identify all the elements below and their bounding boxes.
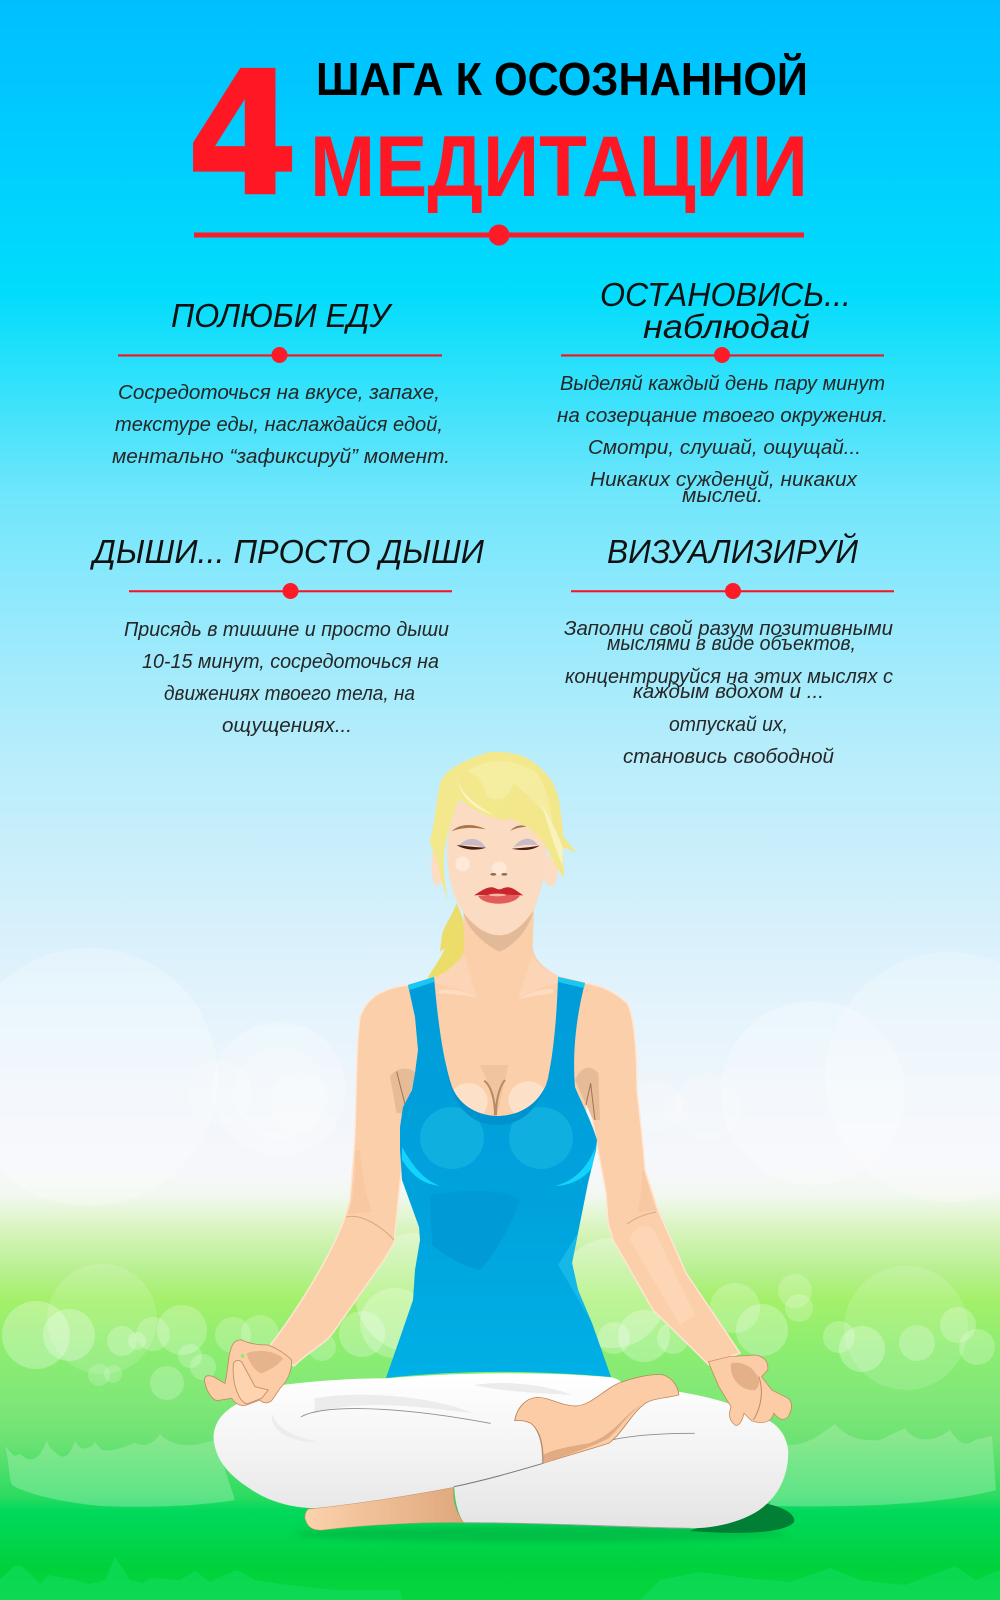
text block: Никаких суждений, никаких [590, 469, 858, 491]
text block: концентрируйся на этих мыслях с [565, 666, 893, 688]
text block: Выделяй каждый день пару минут [560, 373, 885, 395]
text block [557, 373, 888, 507]
text block: движениях твоего тела, на [164, 683, 415, 705]
text block: на созерцание твоего окружения. [557, 405, 888, 427]
heading: наблюдай [643, 308, 810, 345]
panel: visualize [564, 532, 894, 768]
text block: отпускай их, [669, 714, 788, 736]
arm creases and shading [346, 1150, 695, 1325]
ponytail [427, 903, 466, 979]
strap highlights [408, 977, 585, 990]
head, neck and chest [390, 752, 600, 1153]
brows [452, 825, 527, 831]
neckline shading [445, 1060, 552, 1125]
divider [571, 583, 894, 599]
waist fabric folds [430, 1191, 590, 1320]
index finger [233, 1360, 268, 1404]
face [447, 800, 547, 935]
text block: Присядь в тишине и просто дыши [124, 619, 449, 641]
foreground grass blades [0, 1557, 1000, 1600]
text block: Заполни свой разум позитивными [564, 618, 893, 640]
text block: каждым вдохом и ... [633, 681, 824, 703]
armpit shadows [390, 1068, 600, 1120]
translucent grass band [5, 1424, 996, 1507]
text block [112, 382, 450, 468]
eyeshadow [459, 839, 538, 848]
lower foot [305, 1487, 464, 1530]
heading: ДЫШИ... ПРОСТО ДЫШИ [89, 533, 484, 570]
divider [561, 347, 884, 363]
nose [490, 862, 507, 876]
blue tank top [386, 977, 611, 1378]
bokeh circles in the sky [0, 948, 1000, 1206]
panel: stop and observe [557, 276, 888, 507]
heading: ВИЗУАЛИЗИРУЙ [607, 532, 858, 570]
palm shadow [247, 1351, 283, 1373]
fold lines [301, 1409, 694, 1528]
title line: meditation: МЕДИТАЦИИ [310, 119, 808, 215]
big number 4: 4 [187, 35, 298, 233]
panel: just breathe [89, 533, 484, 737]
lower leg (right knee) [454, 1383, 788, 1528]
text block: мыслями в виде объектов, [607, 633, 856, 655]
divider [118, 347, 442, 363]
palm shadow [731, 1363, 759, 1390]
heading [600, 276, 851, 345]
hair front [429, 752, 577, 902]
text block: текстуре еды, наслаждайся едой, [115, 414, 443, 436]
title divider [194, 224, 804, 246]
under-bust cyan arcs [402, 1145, 596, 1186]
foot arch shading [543, 1405, 641, 1463]
left hand [204, 1340, 292, 1405]
title line: steps to mindful: ШАГА К ОСОЗНАННОЙ [316, 53, 808, 105]
bust highlights [420, 1107, 573, 1169]
divider [129, 583, 452, 599]
illustration: meditating woman [204, 752, 794, 1542]
right arm [570, 983, 740, 1365]
fold shading [272, 1383, 572, 1442]
thumb gap [241, 1354, 244, 1358]
heading: ОСТАНОВИСЬ... [600, 276, 851, 313]
text block [564, 618, 893, 768]
text block: ощущениях... [222, 715, 352, 737]
finger line [753, 1377, 761, 1420]
cheek highlight [455, 857, 470, 871]
right hand [709, 1355, 792, 1426]
bokeh circles over the meadow [2, 1233, 995, 1400]
heading: ПОЛЮБИ ЕДУ [171, 297, 393, 334]
text block: Сосредоточься на вкусе, запахе, [118, 382, 440, 404]
text block: мыслей. [682, 485, 763, 507]
ears [431, 844, 558, 887]
ground shadow [295, 1503, 794, 1542]
text block: Смотри, слушай, ощущай... [588, 437, 861, 459]
lips [474, 887, 523, 904]
text block [124, 619, 449, 737]
text block: ментально “зафиксируй” момент. [112, 446, 450, 468]
text block: 10-15 минут, сосредоточься на [142, 651, 439, 673]
left arm [268, 985, 420, 1366]
text block: становись свободной [623, 746, 834, 768]
white trousers [213, 1373, 788, 1530]
hair highlights [457, 761, 563, 867]
title [187, 35, 808, 245]
collarbone highlights [435, 953, 558, 999]
panel: love food [112, 297, 450, 468]
upper leg (left knee and hips) [213, 1373, 623, 1508]
upper foot [515, 1375, 679, 1463]
neck and upper chest [408, 910, 587, 1153]
closed eyes [457, 845, 540, 850]
neck shadow [464, 911, 533, 952]
chest shading [449, 1065, 548, 1120]
